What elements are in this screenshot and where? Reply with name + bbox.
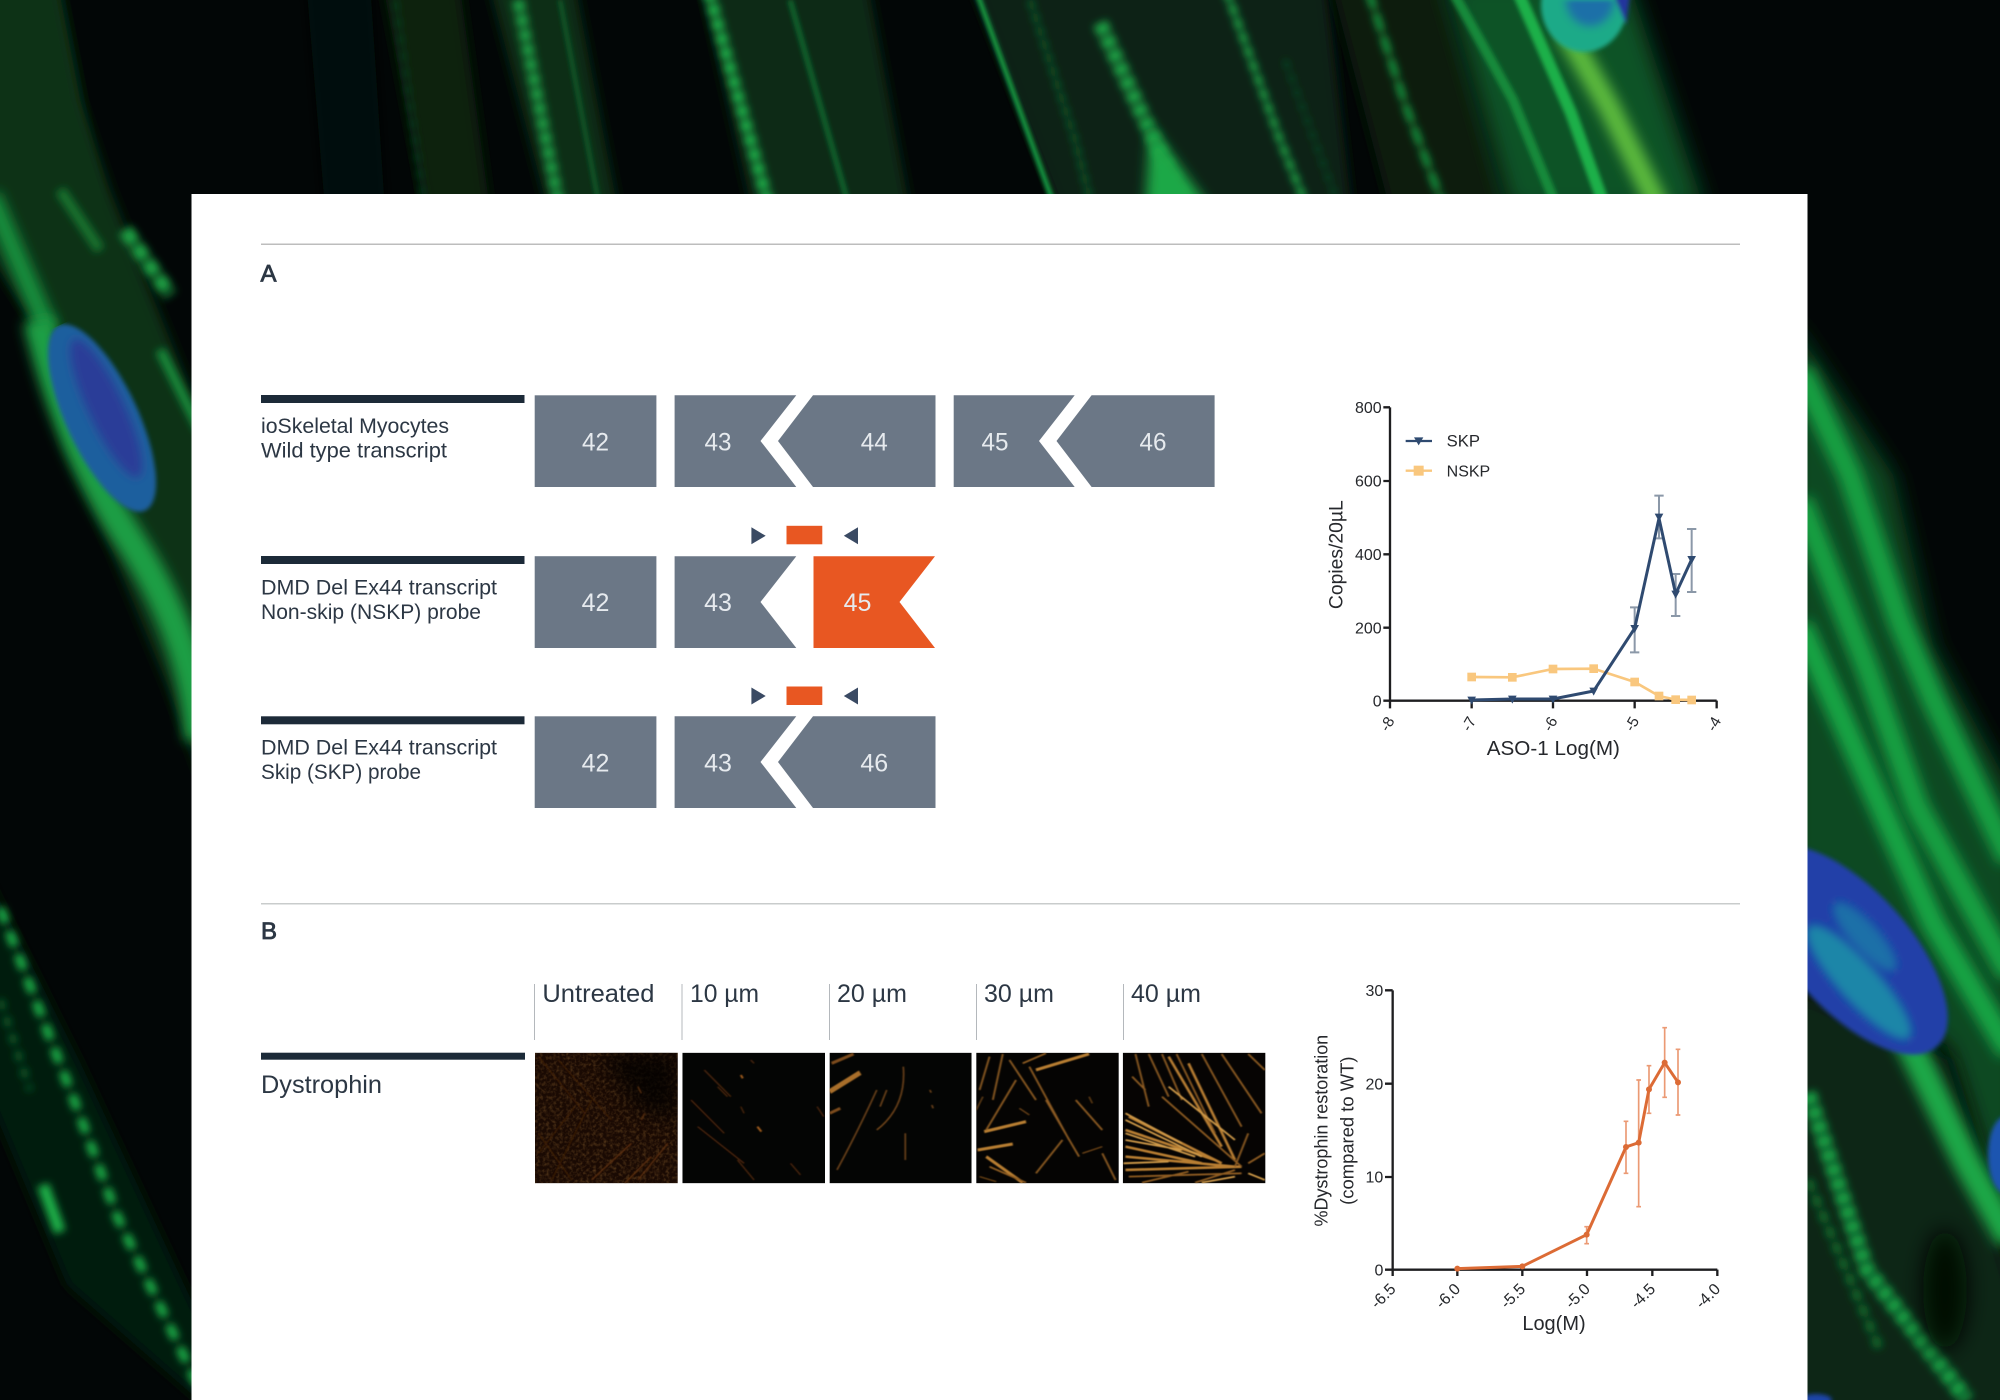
row 2: NSKP bbox=[261, 556, 935, 648]
exon numbers row 3: 42 bbox=[582, 750, 609, 778]
y tick labels: 20 bbox=[1366, 1076, 1383, 1093]
x axis title: Log(M) bbox=[1522, 1313, 1586, 1335]
exons row 2 bbox=[535, 556, 935, 648]
y tick labels: 600 bbox=[1355, 474, 1382, 491]
row bar bbox=[261, 556, 524, 564]
white panel bbox=[192, 194, 1808, 1400]
y tick labels: 400 bbox=[1355, 547, 1382, 564]
row label line 2: Skip (SKP) probe bbox=[261, 761, 421, 784]
exon numbers row 1 bbox=[582, 428, 1166, 456]
micrograph: 10 µm bbox=[682, 1053, 825, 1183]
y tick labels: 800 bbox=[1355, 400, 1382, 417]
y axis title bbox=[1310, 1035, 1357, 1226]
exon numbers row 1: 46 bbox=[1140, 428, 1166, 456]
exon numbers row 1: 42 bbox=[582, 428, 609, 456]
SKP series bbox=[1467, 496, 1696, 705]
x tick labels bbox=[1377, 714, 1725, 734]
row label: DMD Del Ex44 transcript bbox=[261, 737, 497, 760]
x tick labels: -5.0 bbox=[1562, 1281, 1594, 1312]
divider B bbox=[261, 903, 1740, 904]
heading B: B bbox=[261, 918, 277, 945]
y tick labels: 10 bbox=[1366, 1170, 1383, 1187]
column labels: 20 µm bbox=[837, 980, 907, 1008]
x tick labels: -6.5 bbox=[1368, 1281, 1400, 1312]
row bar bbox=[261, 1053, 525, 1060]
nucleus top bbox=[1541, 0, 1630, 52]
micrograph: 20 µm bbox=[830, 1053, 972, 1183]
row bar bbox=[261, 395, 524, 403]
legend bbox=[1406, 432, 1490, 481]
y axis title: %Dystrophin restoration bbox=[1310, 1035, 1331, 1226]
row label line 2: Non-skip (NSKP) probe bbox=[261, 601, 481, 624]
x tick labels: -8 bbox=[1377, 714, 1398, 734]
legend: NSKP bbox=[1447, 464, 1490, 481]
probe row 2 bbox=[751, 526, 858, 544]
x tick labels: -5 bbox=[1622, 714, 1643, 734]
exon numbers row 2: 45 bbox=[844, 589, 871, 617]
x tick labels bbox=[1368, 1281, 1724, 1312]
section A bbox=[260, 244, 1740, 808]
right fibre bbox=[1790, 320, 2000, 1400]
exon numbers row 2 bbox=[582, 589, 871, 617]
y axis title: (compared to WT) bbox=[1336, 1056, 1357, 1205]
exon numbers row 2: 43 bbox=[704, 589, 732, 617]
section B bbox=[261, 903, 1740, 1335]
x tick labels: -6.0 bbox=[1433, 1281, 1464, 1312]
small nuclei right bbox=[1800, 1116, 2000, 1400]
y axis title: Copies/20µL bbox=[1327, 500, 1348, 609]
x tick labels: -7 bbox=[1459, 714, 1480, 734]
chart: copies vs ASO-1 bbox=[1327, 400, 1725, 760]
row 1: wild type bbox=[261, 395, 1215, 487]
row label: ioSkeletal Myocytes bbox=[261, 415, 449, 438]
nucleus right bbox=[1718, 813, 1982, 1087]
x tick labels: -6 bbox=[1540, 714, 1561, 734]
divider A bbox=[261, 244, 1740, 245]
exon numbers row 1: 43 bbox=[704, 428, 732, 456]
upper left fibre bbox=[0, 0, 210, 800]
y tick labels bbox=[1366, 983, 1383, 1279]
lower left fibre bbox=[0, 861, 210, 1400]
axes bbox=[1383, 407, 1717, 708]
legend: SKP bbox=[1447, 432, 1480, 451]
data series bbox=[1454, 1060, 1681, 1272]
column labels: 10 µm bbox=[690, 980, 759, 1008]
probe row 3 bbox=[751, 686, 858, 705]
exon numbers row 1: 45 bbox=[982, 428, 1008, 456]
exon numbers row 2: 42 bbox=[582, 589, 609, 617]
x axis title: ASO-1 Log(M) bbox=[1487, 737, 1620, 760]
exon numbers row 3: 46 bbox=[860, 750, 888, 778]
x tick labels: -4.0 bbox=[1693, 1281, 1724, 1312]
exons row 1 bbox=[535, 395, 1215, 487]
exon numbers row 3 bbox=[582, 750, 888, 778]
micrograph: untreated bbox=[535, 1052, 678, 1183]
column ticks bbox=[534, 984, 1124, 1040]
y tick labels: 200 bbox=[1355, 620, 1382, 637]
heading A: A bbox=[260, 260, 277, 288]
x tick labels: -5.5 bbox=[1498, 1281, 1529, 1312]
column labels bbox=[542, 980, 1201, 1008]
row label: DMD Del Ex44 transcript bbox=[261, 577, 497, 600]
exon numbers row 1: 44 bbox=[861, 428, 888, 456]
column labels: 40 µm bbox=[1131, 980, 1201, 1008]
y tick labels: 0 bbox=[1374, 1262, 1383, 1279]
x tick labels: -4 bbox=[1704, 714, 1725, 734]
axes bbox=[1385, 990, 1717, 1276]
column labels: 30 µm bbox=[984, 980, 1054, 1008]
micrograph: 40 µm bbox=[1123, 1053, 1265, 1183]
y tick labels: 0 bbox=[1373, 693, 1382, 710]
micrograph: 30 µm bbox=[976, 1053, 1119, 1183]
row bar bbox=[261, 716, 524, 724]
exons row 3 bbox=[535, 716, 936, 808]
top fibres bbox=[0, 0, 1705, 215]
x tick labels: -4.5 bbox=[1628, 1281, 1659, 1312]
row label: Dystrophin bbox=[261, 1071, 382, 1099]
column labels: Untreated bbox=[542, 980, 654, 1008]
y tick labels: 30 bbox=[1366, 983, 1383, 1000]
y tick labels bbox=[1355, 400, 1382, 710]
row label line 2: Wild type transcript bbox=[261, 440, 447, 463]
nucleus left bbox=[26, 310, 178, 526]
row 3: SKP bbox=[261, 716, 936, 808]
exon numbers row 3: 43 bbox=[704, 750, 732, 778]
error bars bbox=[1584, 1028, 1680, 1244]
chart: dystrophin restoration bbox=[1310, 983, 1724, 1335]
NSKP series bbox=[1467, 664, 1696, 704]
